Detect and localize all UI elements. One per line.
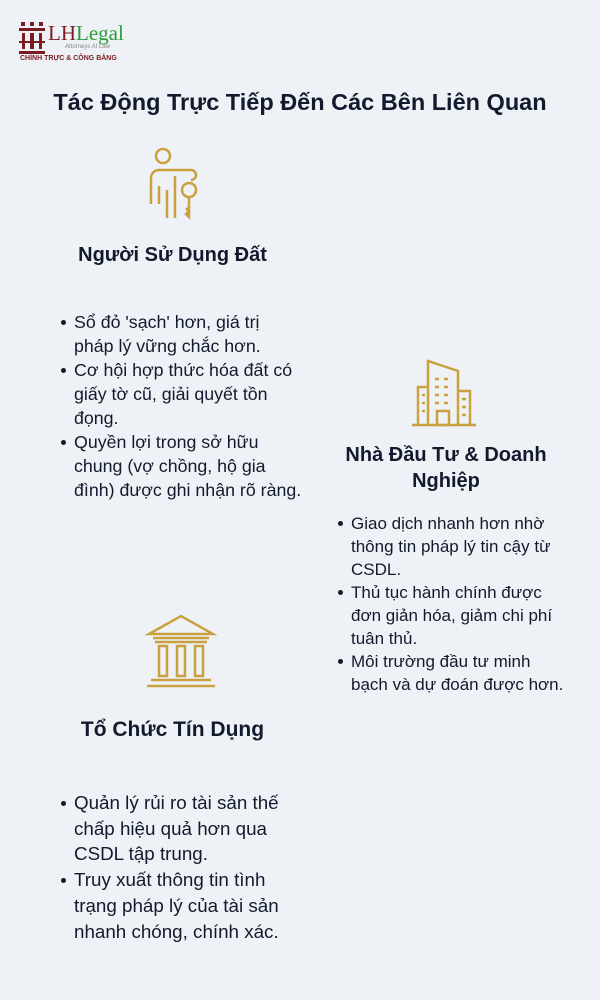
bullets: [61, 312, 301, 500]
bullets: Giao dịch nhanh hơn nhờ: [351, 514, 544, 533]
bullets: CSDL tập trung.: [74, 843, 208, 864]
bullets: giấy tờ cũ, giải quyết tồn: [74, 384, 268, 404]
bullets: đơn giản hóa, giảm chi phí: [351, 606, 552, 625]
heading: Nhà Đầu Tư & Doanh Nghiệp: [345, 444, 547, 492]
heading: Người Sử Dụng Đất: [78, 244, 267, 266]
bullets: trạng pháp lý của tài sản: [74, 895, 279, 916]
bullets: nhanh chóng, chính xác.: [74, 921, 279, 942]
heading: Tổ Chức Tín Dụng: [81, 718, 264, 741]
bullets: đình) được ghi nhận rõ ràng.: [74, 480, 301, 500]
bullets: pháp lý vững chắc hơn.: [74, 336, 261, 356]
bullets: đọng.: [74, 408, 118, 428]
bullets: thông tin pháp lý tin cậy từ: [351, 537, 550, 556]
icon: buildings: [412, 359, 476, 426]
bullets: [61, 792, 279, 942]
panel: người sử dụng đất: [61, 148, 301, 500]
bullets: Sổ đỏ 'sạch' hơn, giá trị: [74, 312, 260, 332]
bullets: chấp hiệu quả hơn qua: [74, 818, 267, 839]
icon: logo mark: [19, 22, 45, 54]
icon: person with key: [150, 148, 198, 220]
bullets: Môi trường đầu tư minh: [351, 652, 530, 671]
bullets: bạch và dự đoán được hơn.: [351, 675, 563, 694]
bullets: tuân thủ.: [351, 629, 417, 648]
logo: [19, 21, 124, 62]
bullets: chung (vợ chồng, hộ gia: [74, 456, 266, 476]
bullets: Cơ hội hợp thức hóa đất có: [74, 360, 292, 380]
bullets: CSDL.: [351, 560, 401, 579]
panel: tổ chức tín dụng: [61, 614, 279, 942]
logo: CHÍNH TRỰC & CÔNG BẰNG: [20, 55, 117, 62]
panel: nhà đầu tư: [338, 359, 563, 694]
title: Tác Động Trực Tiếp Đến Các Bên Liên Quan: [53, 89, 547, 115]
bullets: Truy xuất thông tin tình: [74, 869, 265, 890]
bullets: Quản lý rủi ro tài sản thế: [74, 792, 279, 813]
bullets: [338, 514, 563, 694]
logo text: LHLegal: [48, 21, 124, 45]
logo: Attorneys At Law: [65, 44, 110, 50]
icon: bank: [145, 614, 217, 688]
bullets: Quyền lợi trong sở hữu: [74, 432, 258, 452]
bullets: Thủ tục hành chính được: [351, 583, 542, 602]
